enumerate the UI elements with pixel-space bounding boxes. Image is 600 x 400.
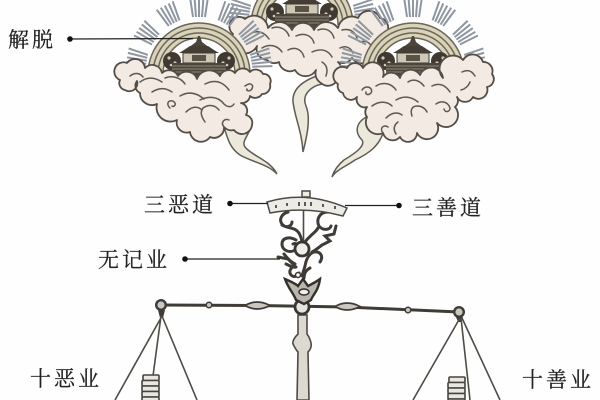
label: 解脱 with leader line: 解脱 <box>8 28 56 52</box>
label: 解脱 with leader line <box>8 28 193 52</box>
label: 十恶业: 十恶业 <box>30 367 102 391</box>
scale pillar <box>293 315 311 400</box>
left pure land: shrine on cloud <box>114 0 277 174</box>
scale beam <box>156 300 464 322</box>
lotus base <box>285 279 320 304</box>
label: 三善道 with leader line <box>345 196 484 220</box>
middle cloud tail <box>293 74 322 152</box>
ornamental scrollwork <box>278 196 336 304</box>
centre pivot <box>295 300 309 314</box>
label: 三善道 with leader line: 三善道 <box>412 196 484 220</box>
right cloud tail <box>332 116 384 177</box>
left pan cords and weights <box>115 316 197 400</box>
label: 三恶道 with leader line <box>144 193 268 217</box>
label: 无记业 with leader line: 无记业 <box>98 248 170 272</box>
right pure land: shrine on cloud <box>332 0 494 177</box>
balance scale <box>115 191 500 400</box>
arc ruler <box>267 191 347 216</box>
left cloud tail <box>224 120 277 174</box>
label: 十善业: 十善业 <box>522 368 594 392</box>
label: 无记业 with leader line <box>98 248 280 272</box>
middle pure land: shrine on cloud <box>229 0 388 152</box>
label: 三恶道 with leader line: 三恶道 <box>144 193 216 217</box>
right pan cords and weights <box>413 318 500 400</box>
